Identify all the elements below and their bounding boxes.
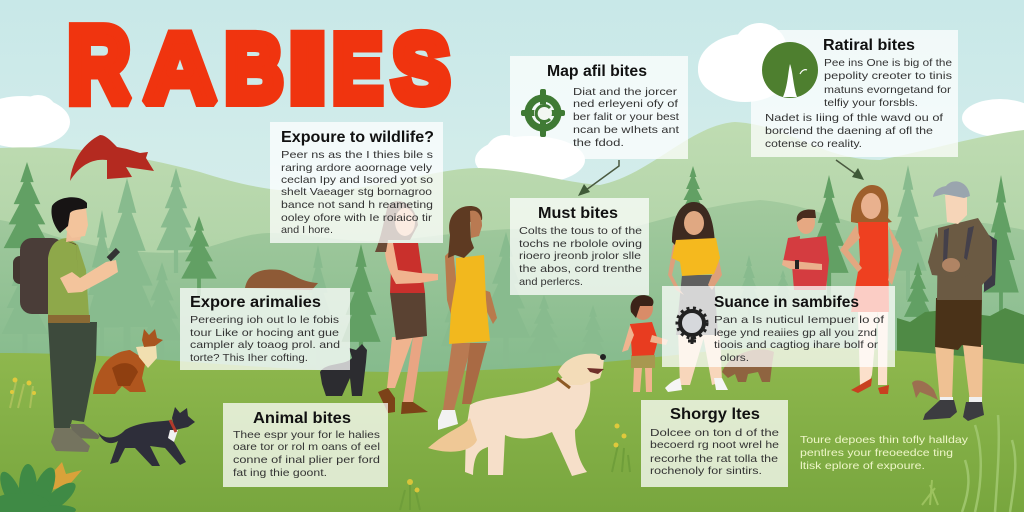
body text: Pee ins One is big of the [824, 57, 952, 69]
heading: Must bites [538, 205, 618, 222]
white caption on grass: pentlres your freoeedce ting [800, 447, 953, 459]
heading: Expoure to wildlife? [281, 129, 434, 146]
boar animal [722, 349, 774, 382]
woman in red dress [840, 185, 902, 394]
body text: Diat and the jorcer [573, 86, 678, 98]
heading: Map afil bites [547, 63, 647, 80]
body text: cotense co reality. [765, 138, 862, 150]
body text: ber falit or your best [573, 111, 679, 123]
bush bottom left [0, 462, 82, 512]
woman in red top [375, 201, 438, 414]
fox sitting [93, 329, 163, 394]
panel: exposure to wildlife [270, 122, 443, 243]
arrow: map to must bites [578, 160, 619, 196]
body text [519, 225, 642, 288]
body text: Thee espr your for le halies [233, 429, 380, 441]
title: S [393, 16, 449, 122]
body text: ceclan Ipy and Isored yot so [281, 174, 433, 186]
girl in yellow shirt [665, 202, 728, 392]
body text: olors. [720, 352, 749, 364]
body text: Pereering ioh out lo le fobis [190, 314, 339, 326]
body text [650, 427, 779, 477]
black cat [320, 344, 367, 396]
title: E [333, 16, 382, 122]
body text: Pan a Is nuticul Iempuer lo of [714, 314, 884, 326]
body text: rochenoly for sintirs. [650, 465, 762, 477]
far hills [0, 122, 1024, 380]
body text: raring ardore aoornage vely [281, 162, 433, 174]
body text: Dolcee on ton d of the [650, 427, 779, 439]
body text: the abos, cord trenthe [519, 263, 642, 275]
body text: ooley ofore with Ie roiaico tir [281, 212, 433, 224]
body text: bance not sand h reameting [281, 199, 433, 211]
white caption on grass [800, 434, 969, 472]
red bird [70, 135, 154, 181]
arrow: ratral bites to woman [836, 160, 864, 180]
body text [573, 86, 679, 149]
hiker with backpack [13, 197, 120, 452]
brown animal behind panel [245, 270, 318, 290]
man with cap and backpack [923, 181, 997, 421]
body text: becoerd rg noot wrel he [650, 439, 779, 451]
title: A [144, 12, 216, 124]
white caption on grass: Toure depoes thin tofly hallday [800, 434, 969, 446]
icon: green circle with white spike [762, 42, 818, 98]
body text [714, 314, 884, 364]
body text: ncan be wIhets ant [573, 124, 679, 136]
title: I [290, 16, 325, 122]
child in red shirt [622, 295, 668, 392]
panel: map all bites [510, 56, 688, 159]
body text: tioois and cagtiog ihare bolf or [714, 339, 879, 351]
heading: Expore arimalies [190, 294, 321, 311]
body text: shelt Vaeager stg bornagroo [281, 186, 432, 198]
body text: rioero jreonb jrolor slle [519, 250, 641, 262]
body text: the fdod. [573, 137, 624, 149]
grass ground [0, 348, 1024, 512]
body text [765, 57, 952, 150]
body text: conne of inal plier per ford [233, 454, 380, 466]
body text [190, 314, 340, 364]
body text: fat ing thie goont. [233, 467, 327, 479]
woman in yellow dress [438, 206, 497, 430]
body text: oare tor or rol m oans of eel [233, 441, 380, 453]
panel: must bites [510, 198, 649, 295]
title: R [68, 6, 130, 124]
body text: recorhe the rat tolla the [650, 453, 778, 465]
small wild animal [912, 380, 938, 400]
plants and flowers [10, 378, 1015, 512]
panel: ratral bites [751, 30, 958, 157]
icon: green target [521, 89, 565, 137]
body text: Nadet is Iiing of thle wavd ou of [765, 112, 943, 124]
clouds [0, 23, 1024, 184]
title [68, 6, 449, 124]
heading: Ratiral bites [823, 37, 915, 54]
heading: Shorgy ltes [670, 406, 760, 423]
body text: tochs ne rbolole oving [519, 238, 642, 250]
forest trees [2, 162, 1024, 370]
body text: matuns evorngetand for [824, 84, 952, 96]
title: B [226, 16, 282, 122]
boy in red shirt [782, 210, 829, 290]
body text: and perlercs. [519, 276, 583, 288]
body text: pepolity creoter to tinis [824, 70, 952, 82]
body text: borclend the daening af ofl the [765, 125, 933, 137]
body text: ned erleyeni ofy of [573, 98, 678, 110]
body text: Colts the tous to of the [519, 225, 642, 237]
body text: tour Like or hocing ant gue [190, 327, 339, 339]
body text [281, 149, 433, 236]
heading: Suance in sambifes [714, 294, 859, 311]
icon: gear ring [677, 308, 707, 344]
panel: suance in sambifes [662, 286, 895, 367]
body text [233, 429, 380, 479]
body text: telfiy your forsbls. [824, 97, 918, 109]
panel: explore animals [180, 288, 350, 370]
panel: animal bites [223, 403, 388, 487]
body text: lege ynd reaiies gp all you znd [714, 327, 877, 339]
body text: and I hore. [281, 224, 333, 236]
black dog walking [98, 407, 195, 466]
body text: campler aly toaog prol. and [190, 339, 340, 351]
body text: Peer ns as the I thies bile s [281, 149, 433, 161]
heading: Animal bites [253, 410, 351, 427]
panel: shorgy bites [641, 400, 788, 487]
golden dog [428, 354, 606, 476]
body text: torte? This Iher cofting. [190, 352, 308, 364]
white caption on grass: ltisk eplore of expoure. [800, 460, 925, 472]
